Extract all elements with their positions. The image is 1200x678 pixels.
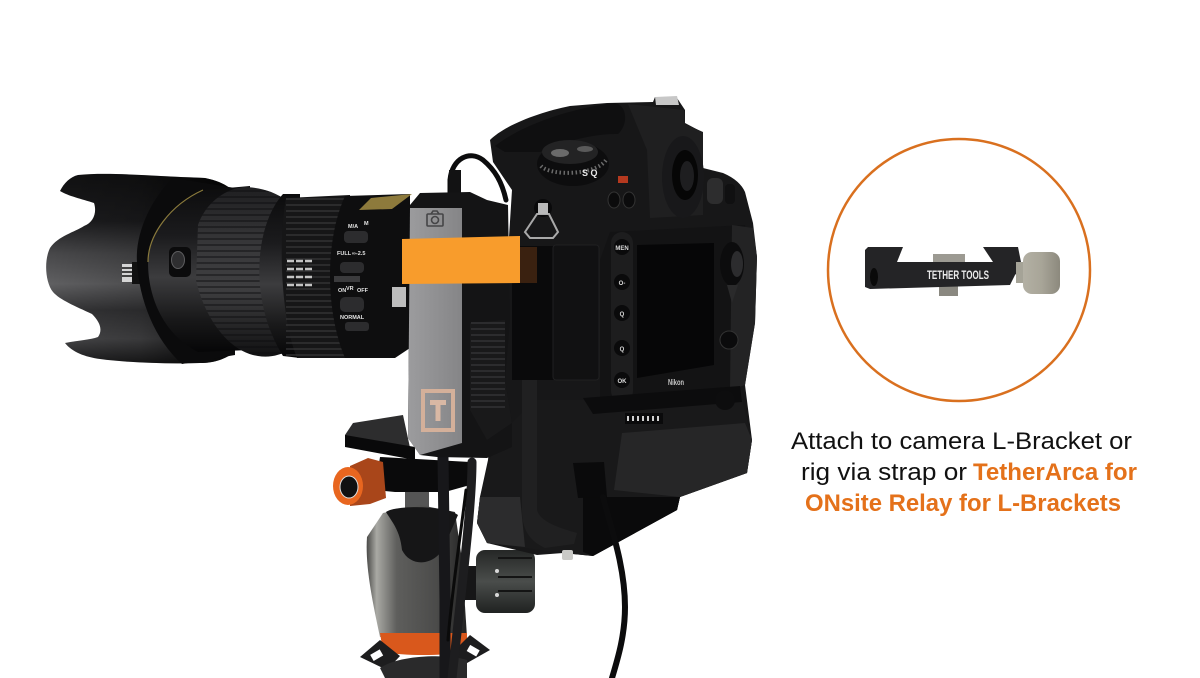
- lens switches: ∞-2.5: [352, 251, 365, 257]
- lens switches: NORMAL: [340, 315, 365, 321]
- caption: ONsite Relay for L-Brackets: [805, 490, 1121, 517]
- detail circle: [828, 139, 1090, 401]
- rear buttons: MEN: [615, 246, 629, 252]
- Nikon badge: Nikon: [668, 378, 684, 387]
- TetherArca bracket: [865, 247, 1060, 296]
- battery grip: [477, 386, 752, 556]
- red record button: [618, 176, 628, 183]
- zoom ring: [282, 195, 352, 358]
- rear buttons: O-: [619, 281, 625, 287]
- quick-release clamp and orange knob: [333, 415, 470, 506]
- ONsite Relay device: [408, 192, 512, 458]
- hood mount ring: [137, 178, 235, 364]
- camera icon: [427, 211, 443, 226]
- side locking knob: [465, 550, 535, 613]
- lens function button: [169, 247, 191, 277]
- infographic canvas: [46, 96, 1137, 678]
- bottom screw: [562, 550, 573, 560]
- Tether Tools T logo: [423, 391, 453, 430]
- orange strap: [402, 236, 520, 284]
- LCD door panel: [553, 245, 599, 380]
- camera body: [477, 96, 757, 560]
- TetherArca bracket: TETHER TOOLS: [927, 270, 989, 282]
- power cable to camera grip: [603, 497, 625, 678]
- mode dial: S Q: [582, 168, 598, 178]
- textured right grip: [730, 225, 757, 390]
- L-bracket: [522, 380, 577, 548]
- hood lock tab: [122, 262, 140, 284]
- cable connector: [573, 462, 607, 498]
- gold distance window: [359, 194, 412, 210]
- caption: Attach to camera L-Bracket or: [791, 428, 1132, 455]
- lens switches: M/A: [348, 224, 358, 230]
- rear buttons: OK: [618, 379, 627, 385]
- lens switches: OFF: [357, 288, 369, 294]
- tripod ball head: [360, 490, 535, 678]
- thin cable: [448, 490, 466, 640]
- relay output cable left: [443, 458, 445, 678]
- camera-to-relay cable loop: [450, 156, 506, 200]
- caption: rig via strap or: [801, 459, 967, 486]
- rear buttons: Q: [620, 312, 625, 318]
- eyepiece: [662, 136, 704, 218]
- playback and delete buttons: [608, 192, 635, 208]
- mode dial: [537, 140, 609, 186]
- lens switches: FULL: [337, 251, 352, 257]
- lens switches: VR: [346, 286, 354, 292]
- lens switches: [334, 221, 369, 331]
- light reflection behind lens: [392, 287, 406, 307]
- lens switches: ON: [338, 288, 346, 294]
- rubber grip: [470, 320, 512, 440]
- rear panel: [600, 225, 752, 405]
- viewfinder block: [628, 104, 703, 218]
- sub selector: [720, 331, 738, 349]
- multi selector: [720, 242, 744, 303]
- inner barrel: [259, 194, 300, 358]
- zoom lens barrel: [148, 184, 412, 360]
- brown reflection: [520, 247, 537, 283]
- prism hump: [495, 103, 625, 152]
- lens switches: M: [364, 221, 369, 227]
- flash hot-shoe: [655, 96, 679, 105]
- switch section: [330, 194, 410, 358]
- rear buttons: Q: [620, 347, 625, 353]
- lens hood: [46, 174, 235, 364]
- LCD screen: [637, 243, 714, 378]
- caption: [791, 428, 1137, 517]
- top-right controls: [707, 178, 735, 204]
- rear buttons: [611, 232, 633, 402]
- relay output cable right: [452, 462, 472, 678]
- focus ring: [196, 187, 282, 357]
- caption: TetherArca for: [973, 459, 1137, 486]
- strap lug: [525, 199, 558, 238]
- dark side panel behind strap: [512, 246, 554, 380]
- cables: [443, 156, 625, 678]
